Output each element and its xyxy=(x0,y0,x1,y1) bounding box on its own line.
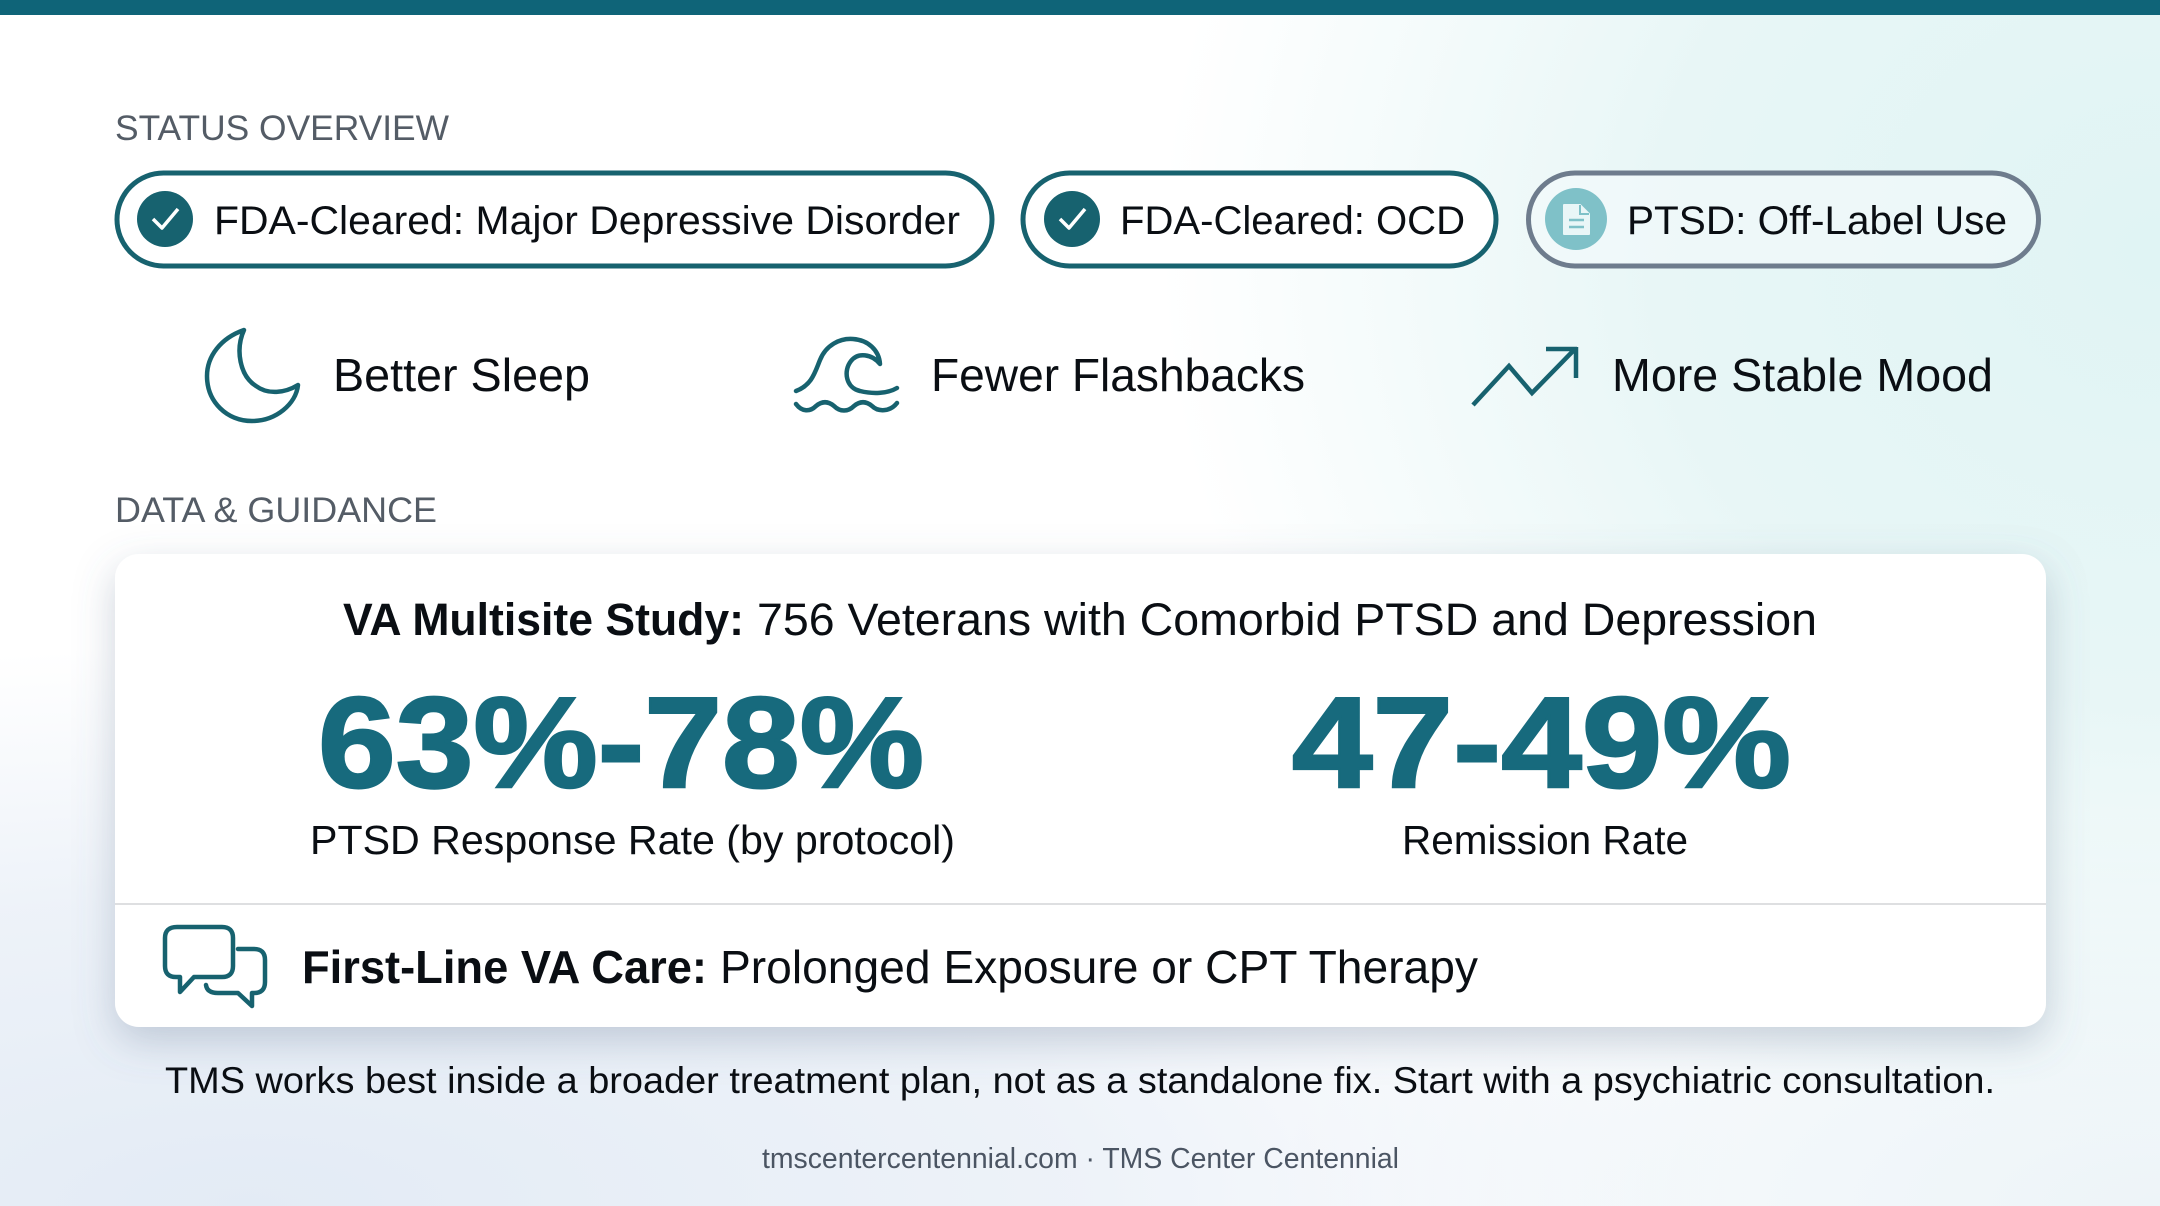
pill label: PTSD: Off-Label Use xyxy=(1627,199,2007,243)
icon: trend arrow xyxy=(1473,347,1577,405)
stat: ptsd response rate: 63%-78% xyxy=(318,671,924,815)
status pill: major depressive disorder xyxy=(117,173,992,266)
benefit: more stable mood xyxy=(1473,347,1993,405)
stat: remission rate: 47-49% xyxy=(1292,671,1791,815)
guidance note: TMS works best inside a broader treatment plan, not as a standalone fix. Start with a psychiatric consultation. xyxy=(165,1060,1995,1101)
icon: chat bubbles xyxy=(165,927,265,1006)
icon: check xyxy=(1044,191,1100,247)
icon: document xyxy=(1545,188,1607,250)
first-line care text: Prolonged Exposure or CPT Therapy xyxy=(720,941,1478,993)
top bar xyxy=(0,0,2160,15)
stat label: Remission Rate xyxy=(1402,817,1688,863)
study title: 756 Veterans with Comorbid PTSD and Depression xyxy=(757,594,1817,645)
benefit label: More Stable Mood xyxy=(1612,349,1993,401)
panel: data card xyxy=(115,554,2046,1027)
stat label: PTSD Response Rate (by protocol) xyxy=(310,817,955,863)
footer: tmscentercentennial.com · TMS Center Centennial xyxy=(762,1143,1399,1175)
icon: moon xyxy=(207,330,298,421)
pill label: FDA-Cleared: OCD xyxy=(1120,199,1465,243)
status pill: ptsd off-label xyxy=(1528,173,2038,266)
benefit label: Fewer Flashbacks xyxy=(931,349,1305,401)
heading: data and guidance: DATA & GUIDANCE xyxy=(115,491,437,530)
icon: check xyxy=(137,191,193,247)
benefit: fewer flashbacks xyxy=(796,339,1305,410)
stat: ptsd response rate xyxy=(310,671,955,863)
benefit: better sleep xyxy=(207,330,590,421)
heading: status overview: STATUS OVERVIEW xyxy=(115,109,449,148)
pill label: FDA-Cleared: Major Depressive Disorder xyxy=(214,199,960,243)
icon: wave xyxy=(796,339,897,410)
stat: remission rate xyxy=(1292,671,1791,863)
first-line care text: First-Line VA Care: xyxy=(302,941,707,993)
status pill: ocd xyxy=(1023,173,1496,266)
benefit label: Better Sleep xyxy=(333,349,590,401)
study title: VA Multisite Study: xyxy=(343,594,744,645)
